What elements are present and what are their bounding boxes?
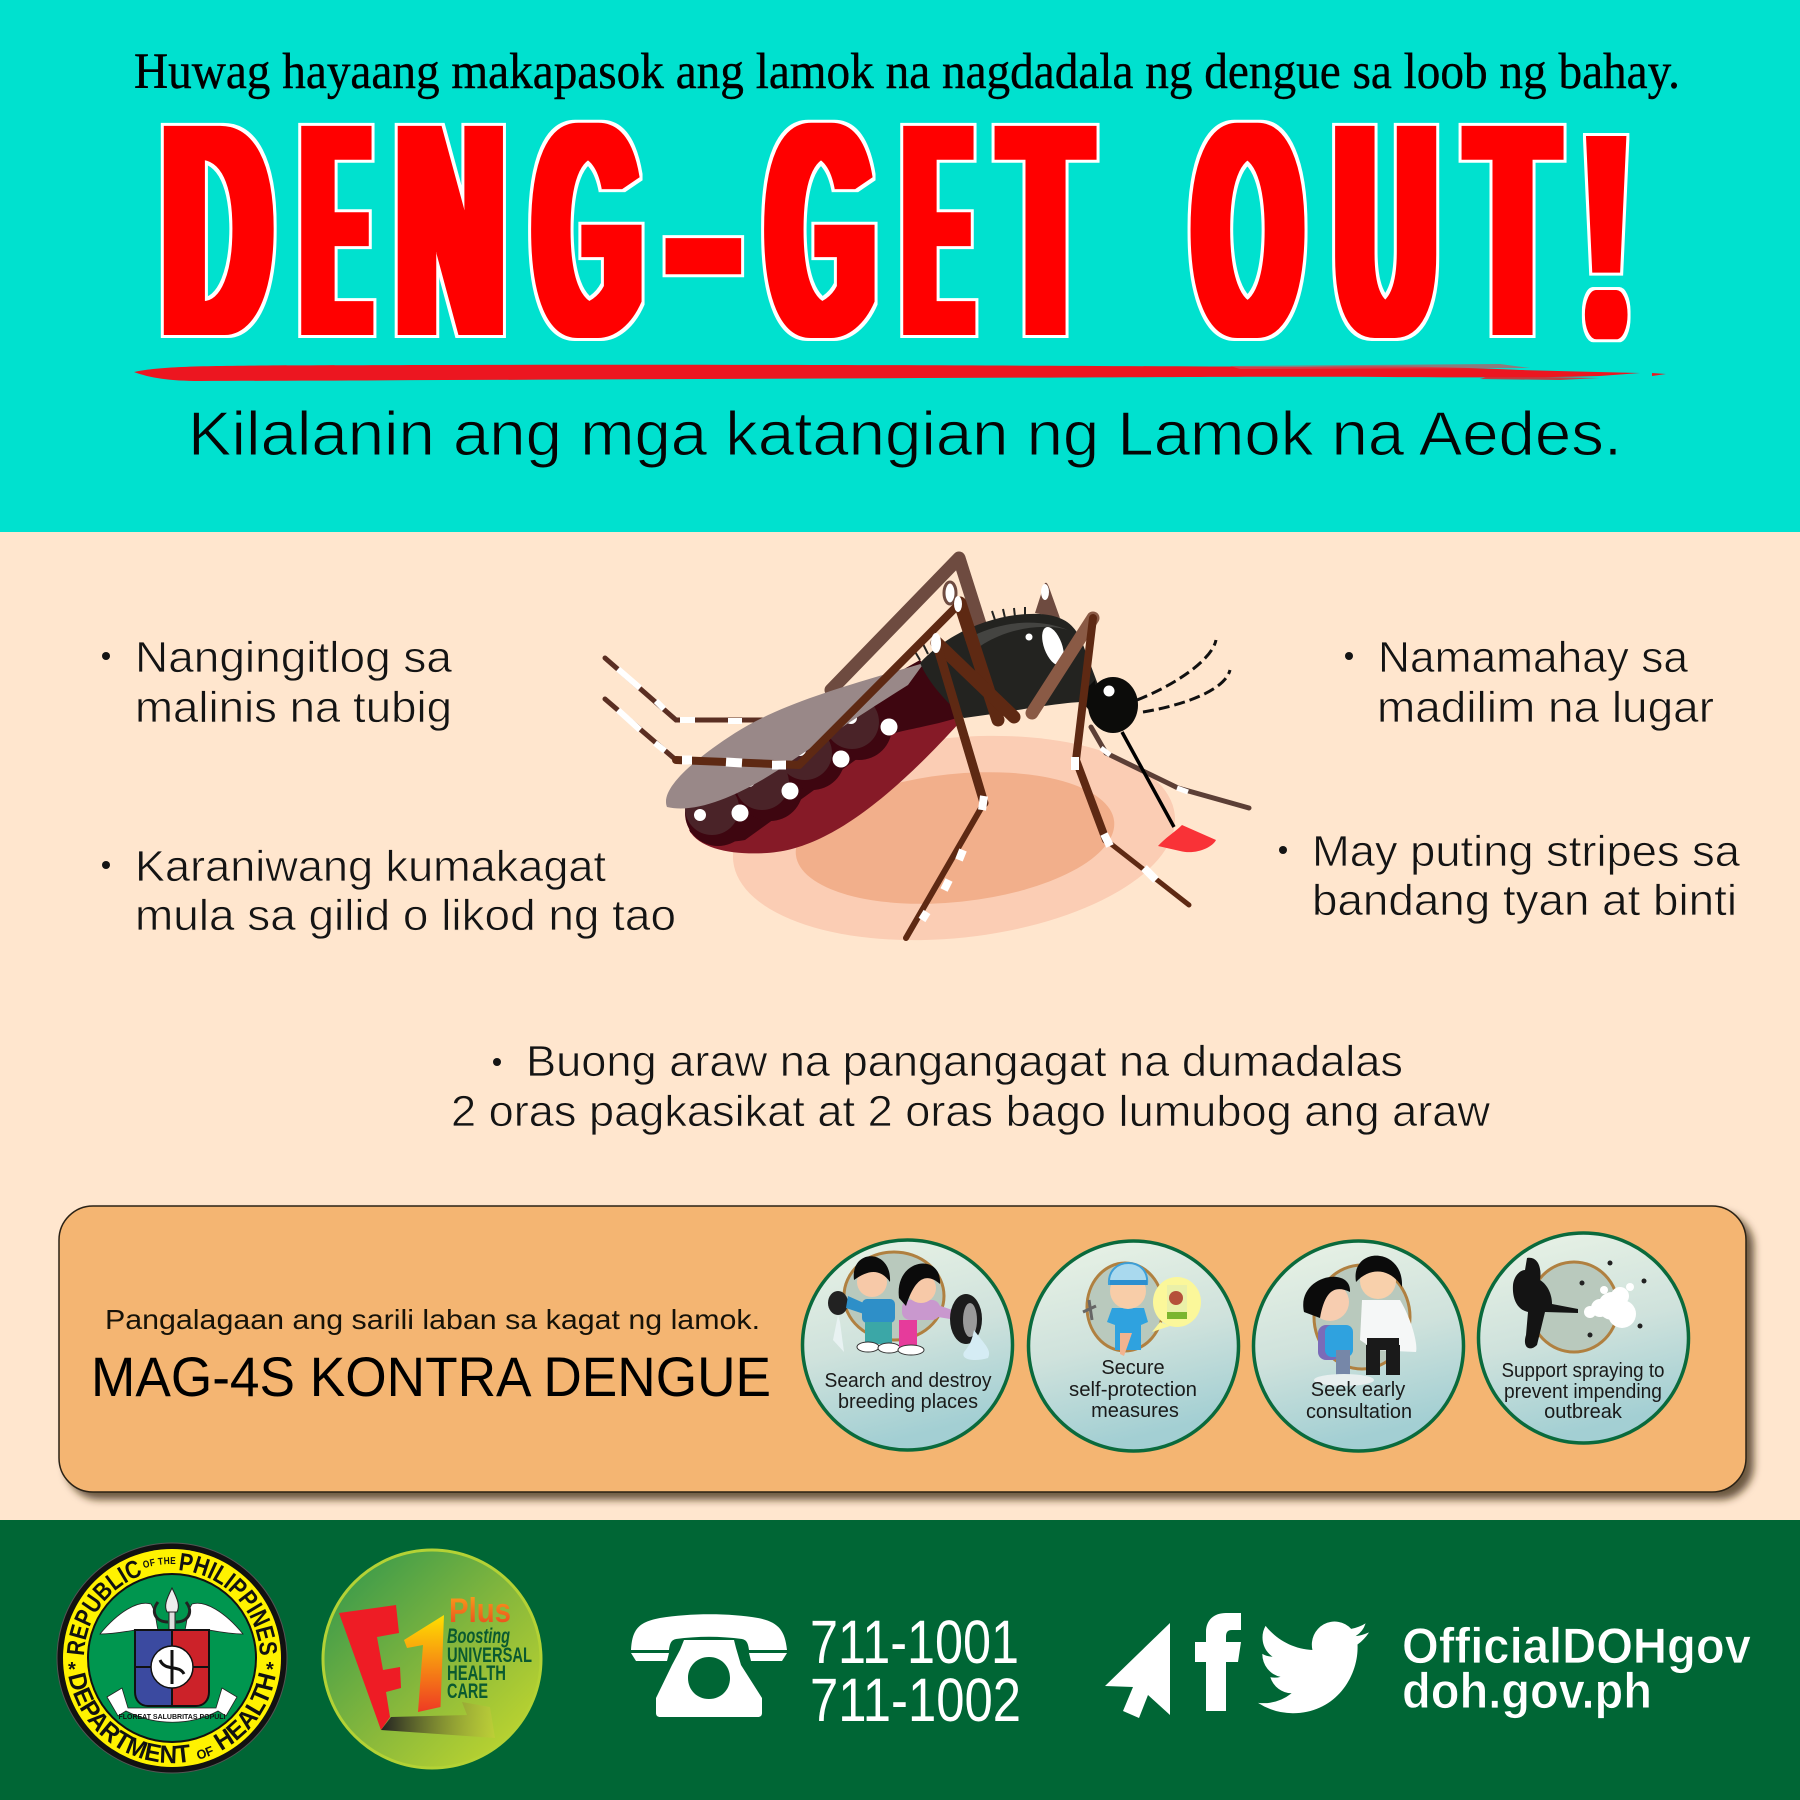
circle: support spraying <box>1478 1233 1688 1443</box>
logo: F1 Plus <box>323 1550 541 1768</box>
F1 tagline: UNIVERSAL <box>447 1644 532 1667</box>
logo: Department of Health seal: DEPARTMENT OF HEALTH <box>68 1672 276 1764</box>
fact: stripes <box>1279 827 1741 925</box>
caption <box>824 1370 992 1413</box>
caption: Seek early <box>1311 1379 1405 1401</box>
title: DENG-GET OUT! <box>164 59 1630 402</box>
card tagline: Pangalagaan ang sarili laban sa kagat ng lamok. <box>105 1304 760 1335</box>
icon: cursor arrow <box>1105 1623 1170 1718</box>
fact: eggs <box>102 633 453 732</box>
fact: biting <box>102 842 676 940</box>
phone numbers: 711-1001 <box>810 1608 1019 1676</box>
subheading: Kilalanin ang mga katangian ng Lamok na Aedes. <box>188 400 1622 469</box>
logo: Department of Health seal: REPUBLIC <box>66 1560 141 1655</box>
ribbon <box>107 1688 237 1722</box>
logo: Department of Health seal: PHILIPPINES <box>179 1553 277 1655</box>
caption: consultation <box>1306 1401 1412 1423</box>
phone numbers <box>810 1608 1021 1734</box>
circle: search and destroy <box>802 1240 1012 1450</box>
caption: Secure <box>1101 1357 1165 1379</box>
F1 tagline: HEALTH <box>447 1662 506 1685</box>
rear legs <box>605 558 1249 808</box>
blood drop <box>1158 825 1216 852</box>
thorax humps <box>944 582 1060 618</box>
icon: facebook <box>1195 1613 1241 1711</box>
joints <box>931 596 962 653</box>
numeral 1 <box>404 1615 444 1712</box>
fact: biting hours: 2 oras pagkasikat at 2 oras bago lumubog ang araw <box>451 1087 1490 1136</box>
fact: stripes: May puting stripes sa <box>1312 827 1741 876</box>
fact: dark places: Namamahay sa <box>1378 633 1689 682</box>
fact: biting hours: Buong araw na pangangagat na dumadalas <box>526 1037 1403 1086</box>
icon: twitter bird <box>1258 1622 1369 1713</box>
shield <box>135 1630 209 1706</box>
thorax hairs <box>914 607 1025 660</box>
caption: outbreak <box>1544 1401 1623 1423</box>
caption <box>1306 1379 1412 1423</box>
abdomen <box>689 660 960 853</box>
F1 tagline: Plus <box>449 1592 511 1630</box>
title: DENG-GET OUT!: - <box>667 61 740 400</box>
circle: early consultation <box>1254 1241 1464 1451</box>
title: DENG-GET OUT!: U <box>1337 60 1434 400</box>
panel: teal header background <box>0 0 1800 532</box>
thorax highlight <box>965 623 1068 668</box>
wing <box>666 663 924 809</box>
title: DENG-GET OUT!: T <box>1470 61 1555 401</box>
fact: eggs: malinis na tubig <box>135 683 452 732</box>
abdomen segments <box>685 660 965 846</box>
phone numbers: 711-1002 <box>810 1666 1021 1734</box>
social handle and website: OfficialDOHgov <box>1402 1618 1751 1674</box>
title: DENG-GET OUT!: ! <box>1583 65 1630 402</box>
logo: Department of Health seal: OF THE <box>143 1557 176 1568</box>
fact: biting: mula sa gilid o likod ng tao <box>135 891 676 940</box>
ribbon: FLOREAT SALUBRITAS POPULI <box>118 1714 226 1721</box>
F1 tagline <box>447 1592 532 1703</box>
caption: prevent impending <box>1504 1381 1662 1403</box>
caption <box>1069 1357 1197 1422</box>
title: DENG-GET OUT!: E <box>305 60 367 400</box>
caption: Search and destroy <box>824 1370 992 1392</box>
title: DENG-GET OUT!: E <box>907 60 969 400</box>
logo: Department of Health seal: * <box>68 1659 76 1681</box>
title: DENG-GET OUT!: O <box>1195 60 1300 400</box>
F1 shadow <box>381 1702 495 1738</box>
title: DENG-GET OUT!: D <box>164 60 270 400</box>
brush stroke underline <box>134 364 1666 381</box>
social handle and website: doh.gov.ph <box>1402 1663 1652 1719</box>
F1 tagline: Boosting <box>447 1625 510 1648</box>
illustration: mosquito on skin <box>605 558 1249 961</box>
shield emblem <box>151 1646 193 1688</box>
proboscis <box>1122 732 1174 827</box>
title: DENG-GET OUT!: T <box>1003 61 1088 401</box>
social handle and website <box>1402 1618 1751 1719</box>
fact: biting hours <box>451 1037 1490 1136</box>
F1 tagline: CARE <box>447 1680 488 1703</box>
icon: telephone <box>631 1614 787 1717</box>
thorax <box>920 614 1100 718</box>
caption: breeding places <box>838 1391 978 1413</box>
subtitle: intro line: Huwag hayaang makapasok ang lamok na nagdadala ng dengue sa loob ng bahay. <box>134 44 1680 100</box>
F letter <box>339 1605 401 1730</box>
caption: Support spraying to <box>1502 1360 1664 1382</box>
caption: measures <box>1091 1400 1179 1422</box>
fact: stripes: bandang tyan at binti <box>1312 876 1737 925</box>
torch and caduceus <box>154 1588 190 1632</box>
card heading: MAG-4S KONTRA DENGUE <box>91 1345 771 1408</box>
head <box>1085 677 1138 733</box>
title: DENG-GET OUT!: G <box>769 59 873 400</box>
circle: self-protection <box>1028 1241 1238 1451</box>
caption: self-protection <box>1069 1379 1197 1401</box>
wings <box>100 1603 243 1634</box>
panel: Mag-4S card <box>59 1206 1746 1492</box>
logo: Department of Health seal <box>56 1542 288 1774</box>
fact: dark places <box>1345 633 1714 732</box>
skin welt <box>723 715 1185 961</box>
fact: dark places: madilim na lugar <box>1377 683 1714 732</box>
mid and front legs <box>605 603 1189 938</box>
antennae <box>1137 640 1230 712</box>
fact: eggs: Nangingitlog sa <box>135 633 453 682</box>
title: DENG-GET OUT!: N <box>398 61 503 400</box>
caption <box>1502 1360 1664 1423</box>
panel: cream body background <box>0 532 1800 1520</box>
logo: Department of Health seal: * <box>266 1659 274 1681</box>
title: DENG-GET OUT!: G <box>536 59 640 400</box>
fact: biting: Karaniwang kumakagat <box>135 842 606 891</box>
panel: green footer background <box>0 1520 1800 1800</box>
